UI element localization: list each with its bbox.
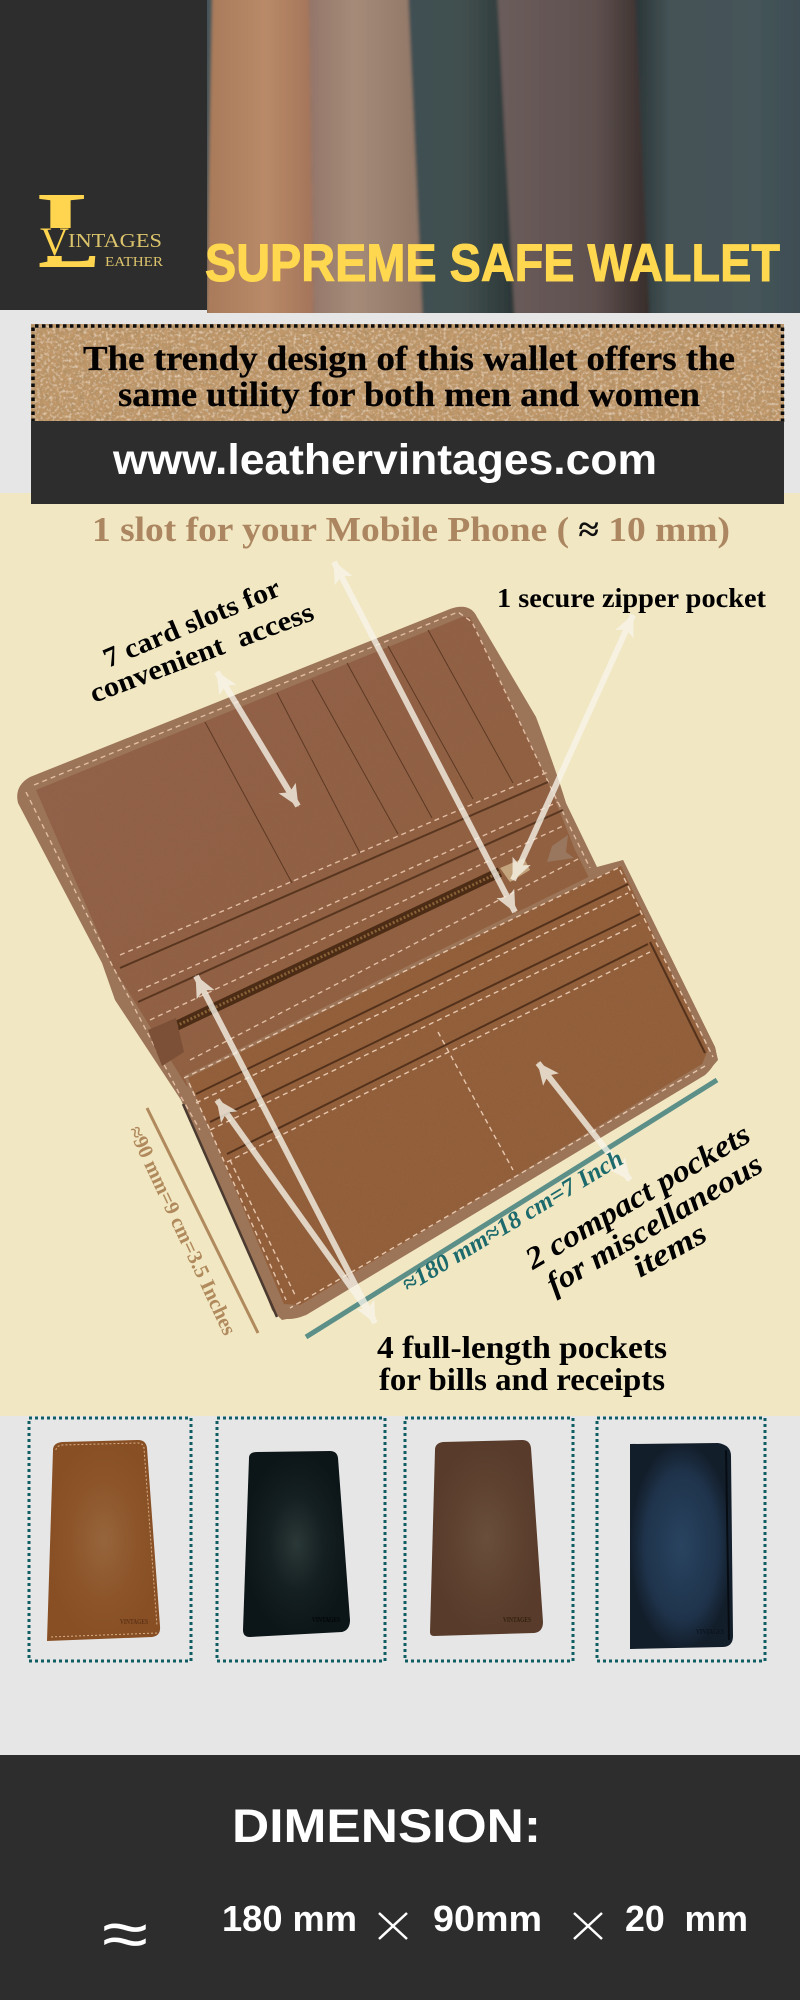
website banner: www.leathervintages.com: [112, 436, 657, 484]
label: full-length pockets: 4 full-length pockets: [377, 1329, 667, 1365]
dimension values: 180 mm: [222, 1898, 357, 1939]
icon: approximately: ≈: [102, 1896, 148, 1972]
variant: brown wallet: VINTAGES: [503, 1616, 531, 1624]
label: compact pockets: 2 compact pockets: [518, 1116, 756, 1277]
variant: navy wallet: VINTAGES: [696, 1628, 724, 1636]
cream feature panel background: [0, 493, 800, 1416]
label: card slots: 7 card slots for: [99, 573, 285, 674]
heading: dimension: DIMENSION:: [232, 1799, 541, 1852]
header panel: logo block: [0, 0, 207, 310]
logo: Leather Vintages: L: [38, 169, 100, 291]
wallet illustration: [17, 607, 718, 1320]
wallet outer body: [17, 607, 716, 1319]
label: full-length pockets: [377, 1329, 667, 1397]
measure line: height: [147, 1108, 258, 1333]
measure line: width: [306, 1080, 717, 1337]
icon: times signs: [379, 1913, 602, 1939]
dimension panel: [0, 1755, 800, 2000]
flap stitching and pockets: [184, 868, 713, 1308]
tagline panel: leather texture band: The trendy design of this wallet offers the: [83, 339, 735, 378]
colour variants row: [29, 1418, 765, 1661]
tagline panel: leather texture band: same utility for both men and women: [118, 375, 700, 414]
dark shadow along lower left edge: [183, 1104, 277, 1317]
logo: Leather Vintages: [39, 195, 163, 267]
dimension values: 20 mm: [625, 1898, 748, 1939]
label: full-length pockets: for bills and receipts: [379, 1361, 665, 1397]
interior pocket bands: [120, 772, 580, 1060]
logo: Leather Vintages: V: [40, 219, 69, 264]
label: height dimension: ≈90 mm=9 cm=3.5 Inches: [123, 1122, 242, 1339]
header photo: leather swatches: [206, 0, 800, 325]
dimension values: 90mm: [433, 1898, 542, 1939]
wallet inner lining with card slots: [36, 617, 590, 1200]
variant: navy wallet: [597, 1418, 765, 1661]
website banner: [31, 421, 784, 504]
variant: tan wallet: VINTAGES: [120, 1618, 148, 1626]
logo: Leather Vintages: INTAGES: [68, 230, 162, 252]
arrows: [196, 562, 633, 1323]
label: compact pockets: [518, 1116, 768, 1301]
label: compact pockets: items: [626, 1215, 712, 1284]
card slot divider lines: [205, 630, 513, 883]
label: zipper pocket: 1 secure zipper pocket: [497, 583, 766, 613]
label: compact pockets: for miscellaneous: [540, 1146, 768, 1301]
heading: phone slot: 1 slot for your Mobile Phone ( ≈ 10 mm): [92, 510, 730, 549]
front flap with pockets: [188, 866, 708, 1305]
variant: brown wallet: [405, 1418, 573, 1661]
variant: tan wallet: [29, 1418, 191, 1661]
zipper: [148, 835, 574, 1066]
variant: black wallet: [217, 1418, 385, 1661]
variant: black wallet: VINTAGES: [312, 1616, 340, 1624]
front flap rim: [184, 860, 718, 1320]
logo: Leather Vintages: EATHER: [105, 255, 164, 270]
tagline panel: leather texture band: [31, 324, 784, 422]
label: card slots: convenient access: [86, 597, 318, 710]
stitching around edges: [26, 612, 590, 1130]
logo: Leather Vintages: L: [37, 169, 125, 291]
label: width dimension: ≈180 mm≈18 cm=7 Inch: [398, 1146, 628, 1298]
dimension values: [222, 1898, 748, 1939]
